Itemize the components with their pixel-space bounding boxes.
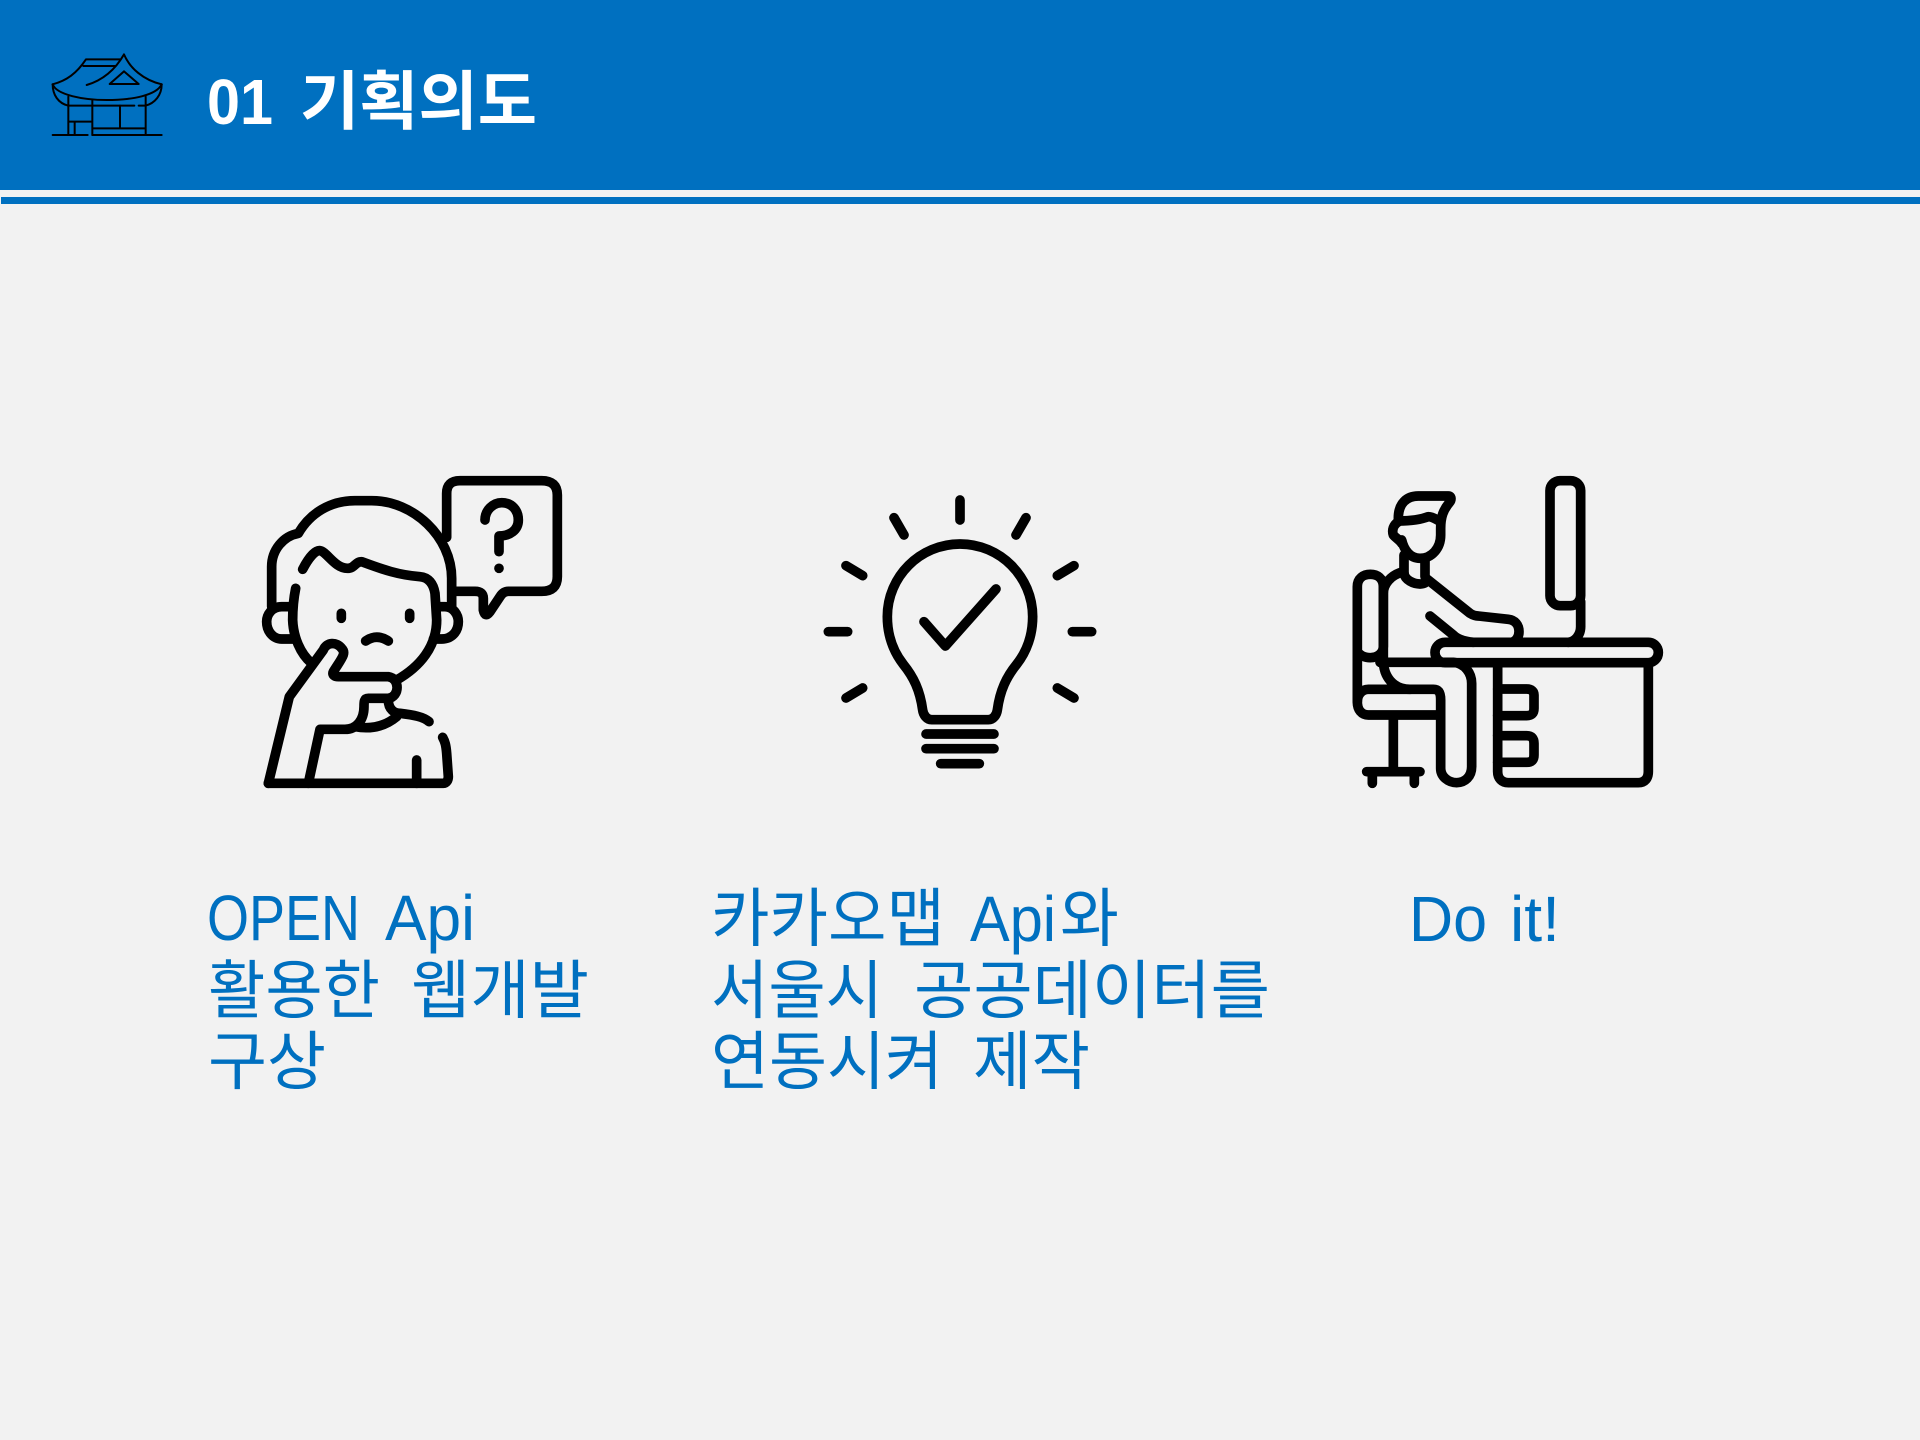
icon: light bulb with check mark — [828, 500, 1092, 764]
icon: hanok house — [53, 54, 162, 135]
text: kakao map api with seoul public data: 서울시 — [711, 955, 883, 1027]
text: do it: Do — [1409, 883, 1487, 955]
text: kakao map api with seoul public data: 연동시켜 — [711, 1026, 943, 1098]
text: kakao map api with seoul public data: 제작 — [973, 1026, 1090, 1098]
text: open api web development concept: 구상 — [208, 1026, 326, 1098]
icon: thinking person with question bubble — [267, 481, 557, 783]
header band — [0, 0, 1920, 190]
text: kakao map api with seoul public data — [711, 883, 1270, 1098]
text: open api web development concept: 활용한 — [208, 955, 380, 1027]
text: kakao map api with seoul public data: 공공데이터를 — [914, 955, 1270, 1027]
icon: person working at desk — [1357, 481, 1658, 783]
header rule — [1, 197, 1920, 204]
text: open api web development concept: 웹개발 — [411, 955, 589, 1027]
title: 01 — [207, 66, 273, 138]
text: kakao map api with seoul public data: Api — [970, 883, 1056, 955]
text: kakao map api with seoul public data: 와 — [1060, 883, 1119, 955]
text: open api web development concept: Api — [385, 882, 475, 954]
title: 기획의도 — [300, 66, 537, 138]
text: open api web development concept — [207, 882, 589, 1098]
text: kakao map api with seoul public data: 카카오맵 — [711, 883, 945, 955]
text: do it: it! — [1510, 883, 1560, 955]
text: open api web development concept: OPEN — [207, 882, 360, 954]
text: do it — [1409, 883, 1560, 955]
